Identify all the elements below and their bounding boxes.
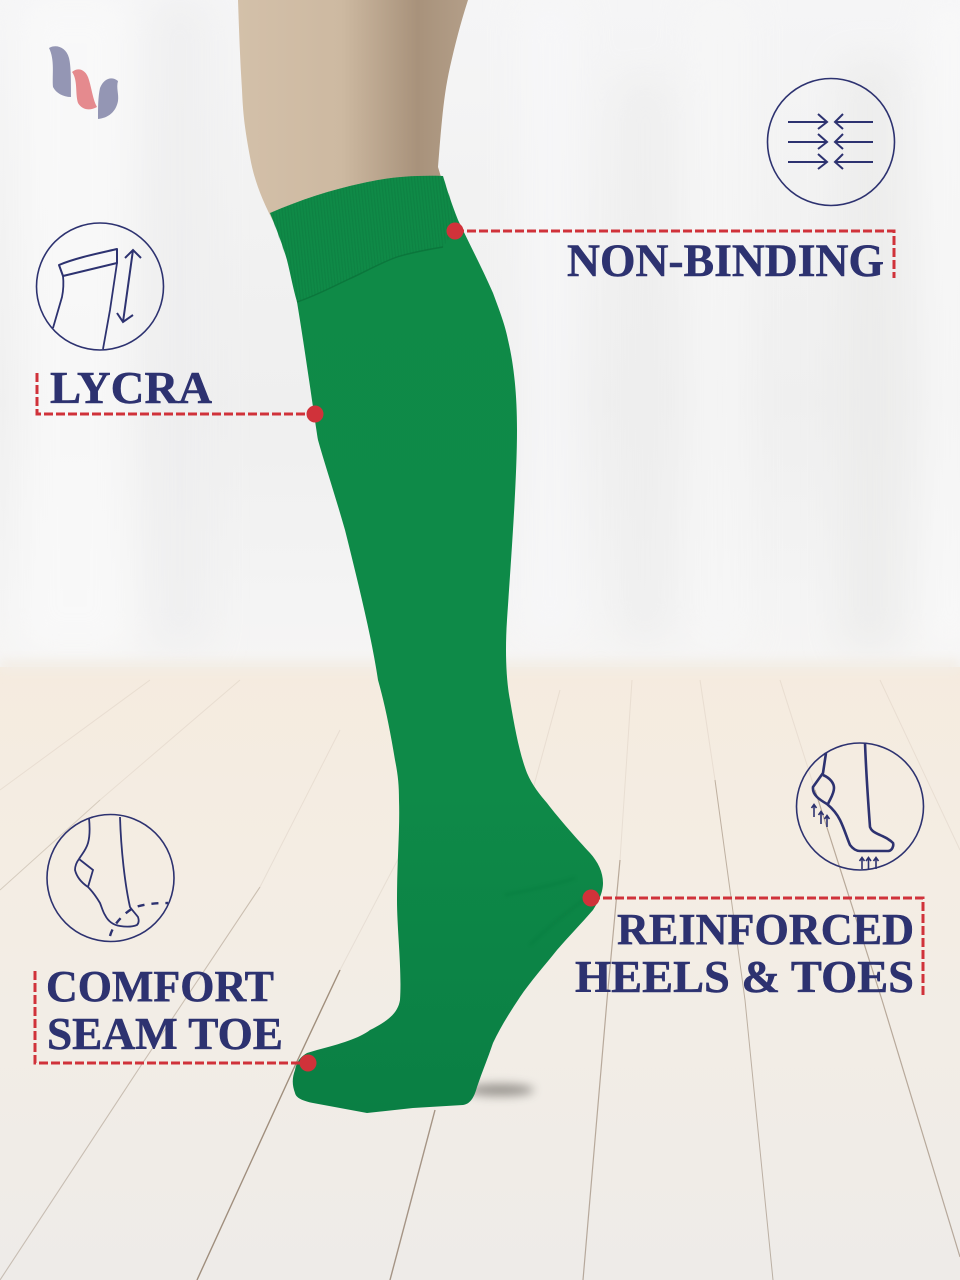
label: reinforced: REINFORCED xyxy=(617,905,914,954)
callout: reinforced heels and toes xyxy=(575,743,924,1002)
leg xyxy=(238,0,468,225)
leader line: non-binding xyxy=(446,222,894,278)
background: curtain wall xyxy=(0,0,960,672)
icon: inward arrows xyxy=(768,78,894,206)
label: non-binding: NON-BINDING xyxy=(567,235,884,287)
callout: non-binding xyxy=(446,78,894,287)
label: comfort: COMFORT xyxy=(46,962,274,1011)
leader line: reinforced heels and toes xyxy=(582,890,923,995)
label: seam toe: SEAM TOE xyxy=(47,1009,283,1059)
icon: toe seam foot xyxy=(47,814,174,942)
background: wooden floor xyxy=(0,660,960,1280)
callout: comfort seam toe xyxy=(35,814,316,1072)
icon: stretch cuff xyxy=(36,223,164,350)
label: heels and toes: HEELS & TOES xyxy=(575,952,914,1002)
label: lycra: LYCRA xyxy=(50,362,212,413)
sock cuff ribbing xyxy=(270,176,451,266)
foot shadow xyxy=(466,1084,534,1096)
icon: reinforced heel foot xyxy=(796,743,924,870)
callout: lycra xyxy=(36,223,324,422)
leader line: comfort seam toe xyxy=(35,971,316,1072)
logo xyxy=(49,46,118,119)
green knee-high sock xyxy=(260,170,603,1113)
leader line: lycra xyxy=(37,373,324,422)
